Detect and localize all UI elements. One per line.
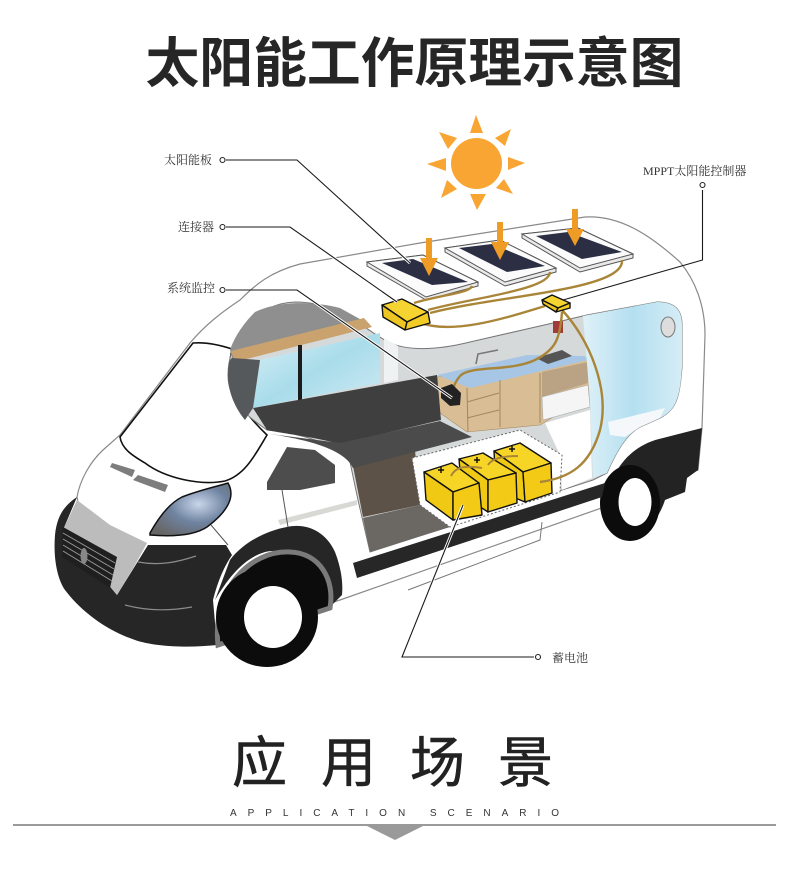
shower floor [608,408,665,437]
door mirror [267,447,335,490]
left curtain [228,358,260,420]
floor [363,505,450,552]
bumper crease highlights [125,556,196,610]
rear shower area [583,302,682,478]
section subheading: APPLICATION SCENARIO [230,808,559,819]
stove [536,350,572,364]
solar panel 2 [445,240,556,286]
battery 2 [459,453,517,512]
lower body lines [408,522,542,590]
battery links [451,456,518,476]
roof solar panels [367,228,633,300]
front wheel arch [217,552,331,645]
front wheel [216,567,318,667]
wood trim [231,318,372,362]
door shut line [211,490,288,545]
windshield [120,343,267,482]
ceiling strip [230,303,367,362]
van illustration [55,209,705,667]
battery bay [412,430,562,527]
rear wheel [600,465,660,541]
label: connector: 连接器 [178,219,214,234]
battery 1 [424,463,482,520]
label: system monitor: 系统监控 [167,280,215,295]
red alarm [553,321,563,333]
fridge [542,385,590,420]
door stripe [278,500,357,525]
battery terminals [438,446,515,473]
side sill [353,483,605,578]
under seat storage [353,450,420,517]
white cabinet [545,410,592,490]
van body [77,217,705,645]
solar panel 1 [367,255,478,300]
MPPT controller box [542,295,570,312]
bench seat back [253,375,441,444]
label: MPPT controller: MPPT太阳能控制器 [643,163,746,178]
side pillar [384,338,398,383]
label: battery: 蓄电池 [552,650,588,665]
grille [62,527,117,588]
hood vents [110,463,168,492]
front bumper [55,497,342,647]
section heading: 应用场景 [232,732,553,794]
label: solar panel: 太阳能板 [164,152,212,167]
connector box [382,299,430,330]
counter top [437,355,588,388]
rear bumper [603,428,702,533]
grille panel [63,500,147,595]
interior cutaway [228,302,682,552]
oven panel [542,362,588,397]
leader lines [226,160,702,657]
window pillar [298,345,302,400]
tap [476,350,498,364]
title: 太阳能工作原理示意图 [146,34,683,94]
system monitor [441,384,461,406]
headlight [150,483,231,536]
fuel cap [661,317,675,337]
solar panel 3 [522,228,633,272]
divider with pointer [13,824,776,840]
sun arrows [420,209,584,276]
kitchen cabinet [437,358,590,432]
battery 3 [494,443,552,502]
wiring [414,260,622,482]
bench seat cushion [270,421,472,468]
icon: sun [427,115,525,210]
drawers [467,373,540,432]
cab window [253,333,380,408]
